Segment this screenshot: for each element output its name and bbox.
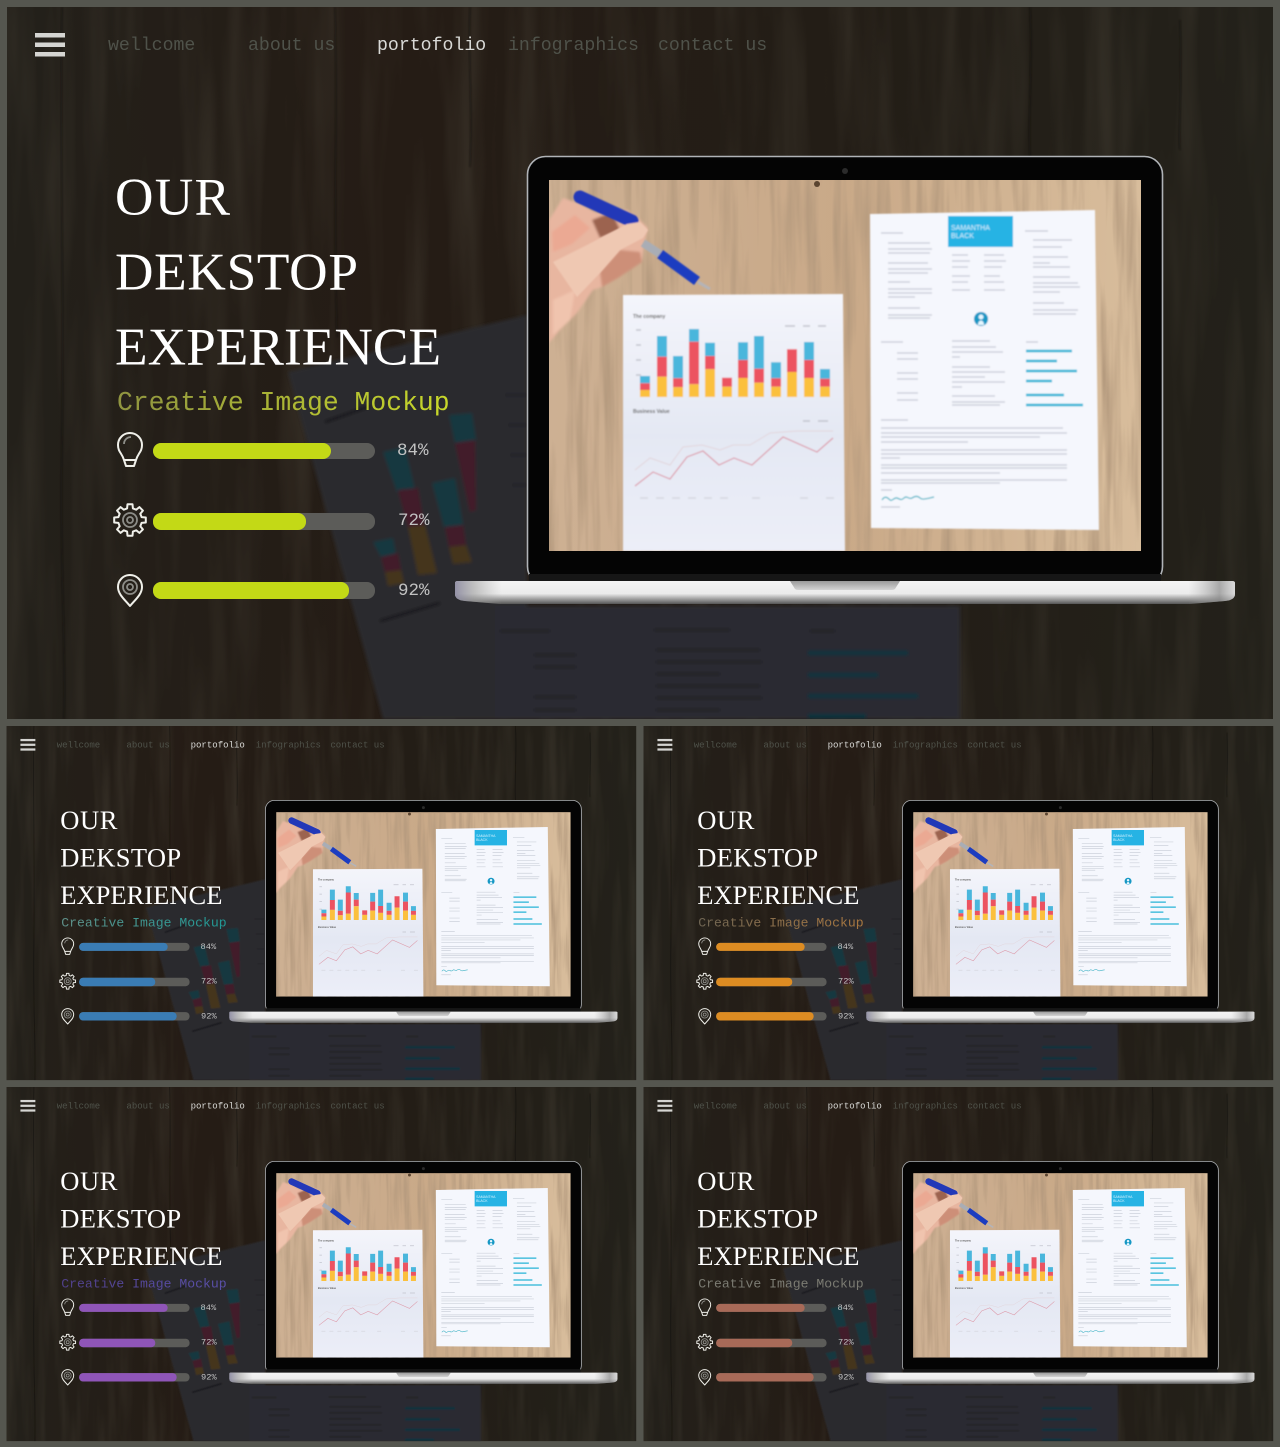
panel: orange variant — [644, 726, 1273, 1080]
icon: menu — [35, 33, 65, 56]
navigation: contact us — [967, 1100, 1022, 1111]
panel: main slide, lime — [7, 7, 1273, 719]
icon: light bulb — [118, 433, 142, 466]
progress bar 92%: 92% — [838, 1373, 854, 1383]
title — [116, 179, 438, 365]
progress bar 92%: 92% — [398, 581, 430, 601]
subtitle: Creative Image Mockup — [698, 1276, 864, 1291]
subtitle: Creative Image Mockup — [698, 915, 864, 930]
navigation: about us — [763, 1100, 807, 1111]
progress bar 84% — [716, 942, 854, 951]
navigation: wellcome — [57, 739, 100, 750]
icon: menu — [20, 739, 35, 751]
progress bar 84% — [79, 1303, 217, 1313]
progress bar 72%: 72% — [838, 977, 854, 987]
navigation: wellcome — [108, 36, 195, 56]
title: DEKSTOP — [115, 242, 358, 302]
navigation: infographics — [893, 739, 958, 750]
progress bar 92% — [716, 1012, 854, 1022]
title: EXPERIENCE — [697, 1241, 859, 1271]
navigation: infographics — [256, 739, 321, 750]
navigation: contact us — [330, 1100, 385, 1111]
title: DEKSTOP — [697, 1204, 818, 1234]
icon: map pin — [62, 1009, 74, 1024]
title: EXPERIENCE — [697, 880, 859, 910]
progress bar 84%: 84% — [397, 441, 429, 461]
navigation: infographics — [893, 1100, 958, 1111]
title — [698, 812, 858, 904]
subtitle: Creative Image Mockup — [61, 915, 227, 930]
icon: gear — [60, 1334, 76, 1350]
title: OUR — [60, 1166, 118, 1196]
laptop mockup — [229, 800, 617, 1023]
title: OUR — [697, 805, 755, 835]
navigation: portofolio — [191, 1100, 245, 1111]
faded background paper — [146, 879, 481, 1080]
title: EXPERIENCE — [60, 1241, 222, 1271]
subtitle: Creative Image Mockup — [117, 388, 450, 418]
faded background paper — [146, 1240, 481, 1441]
navigation: about us — [763, 739, 807, 750]
panel: purple variant — [7, 1087, 636, 1441]
progress bar 72% — [79, 1338, 217, 1348]
navigation: portofolio — [828, 1100, 882, 1111]
icon: menu — [657, 739, 672, 751]
title: OUR — [697, 1166, 755, 1196]
progress bar 92%: 92% — [838, 1012, 854, 1022]
navigation: wellcome — [57, 1100, 100, 1111]
panel: brown variant — [644, 1087, 1273, 1441]
icon: menu — [657, 1100, 672, 1112]
wood background — [7, 1087, 636, 1441]
navigation — [108, 36, 766, 54]
navigation: about us — [126, 1100, 170, 1111]
navigation: about us — [248, 36, 335, 56]
progress bar 84%: 84% — [838, 942, 854, 952]
faded background paper — [783, 1240, 1118, 1441]
icon: gear — [60, 973, 76, 989]
navigation — [56, 741, 384, 750]
progress bar 84%: 84% — [838, 1303, 854, 1313]
progress bar 72% — [79, 978, 217, 986]
progress bar 92% — [716, 1373, 854, 1383]
navigation: portofolio — [191, 739, 245, 750]
title: EXPERIENCE — [115, 318, 441, 376]
navigation — [694, 1100, 1022, 1111]
faded background paper — [288, 315, 960, 719]
icon: gear — [114, 504, 146, 536]
progress bar 84%: 84% — [201, 1303, 217, 1313]
wood background — [644, 1087, 1273, 1441]
title: DEKSTOP — [60, 843, 181, 873]
progress bar 72% — [716, 977, 854, 987]
progress bar 92% — [79, 1373, 217, 1383]
panel: blue variant — [7, 726, 636, 1080]
wood background — [7, 7, 1273, 719]
progress bar 84%: 84% — [201, 942, 217, 952]
navigation: portofolio — [828, 739, 882, 750]
icon: menu — [20, 1100, 35, 1112]
navigation — [57, 1100, 385, 1111]
icon: map pin — [699, 1370, 711, 1385]
navigation: wellcome — [694, 739, 737, 750]
progress bar 92% — [153, 582, 430, 599]
title: OUR — [115, 168, 230, 226]
wood background — [7, 726, 636, 1080]
icon: gear — [697, 1334, 713, 1350]
subtitle: Creative Image Mockup — [61, 1276, 227, 1291]
progress bar 72% — [716, 1338, 854, 1348]
icon: light bulb — [699, 1299, 711, 1315]
progress bar 72%: 72% — [398, 511, 430, 531]
icon: map pin — [118, 575, 142, 606]
progress bar 84% — [153, 443, 428, 459]
progress bar 72%: 72% — [201, 977, 217, 987]
icon: gear — [697, 973, 713, 989]
title — [60, 1166, 222, 1271]
title — [697, 1166, 859, 1271]
navigation: infographics — [256, 1100, 321, 1111]
navigation: contact us — [967, 739, 1022, 750]
progress bar 92%: 92% — [201, 1012, 217, 1022]
progress bar 92% — [79, 1012, 217, 1020]
wood background — [644, 726, 1273, 1080]
icon: light bulb — [699, 938, 711, 954]
progress bar 92%: 92% — [201, 1373, 217, 1383]
title: EXPERIENCE — [60, 880, 222, 910]
progress bar 72%: 72% — [201, 1338, 217, 1348]
navigation: wellcome — [694, 1100, 737, 1111]
navigation: contact us — [658, 36, 767, 56]
progress bar 84% — [79, 942, 216, 951]
laptop mockup — [229, 1161, 617, 1384]
icon: light bulb — [62, 938, 74, 954]
navigation — [694, 741, 1021, 750]
faded background paper — [783, 879, 1118, 1080]
icon: map pin — [62, 1370, 74, 1385]
title — [61, 812, 222, 904]
progress bar 72%: 72% — [838, 1338, 854, 1348]
navigation: about us — [126, 739, 170, 750]
title: DEKSTOP — [697, 843, 818, 873]
title: DEKSTOP — [60, 1204, 181, 1234]
navigation: infographics — [508, 36, 639, 56]
progress bar 72% — [153, 513, 430, 530]
laptop mockup — [866, 800, 1254, 1023]
progress bar 84% — [716, 1303, 854, 1313]
navigation: contact us — [330, 739, 385, 750]
navigation: portofolio — [377, 36, 486, 56]
laptop mockup — [866, 1161, 1254, 1384]
title: OUR — [60, 805, 118, 835]
icon: map pin — [699, 1009, 711, 1024]
icon: light bulb — [62, 1299, 74, 1315]
laptop mockup — [455, 156, 1235, 604]
